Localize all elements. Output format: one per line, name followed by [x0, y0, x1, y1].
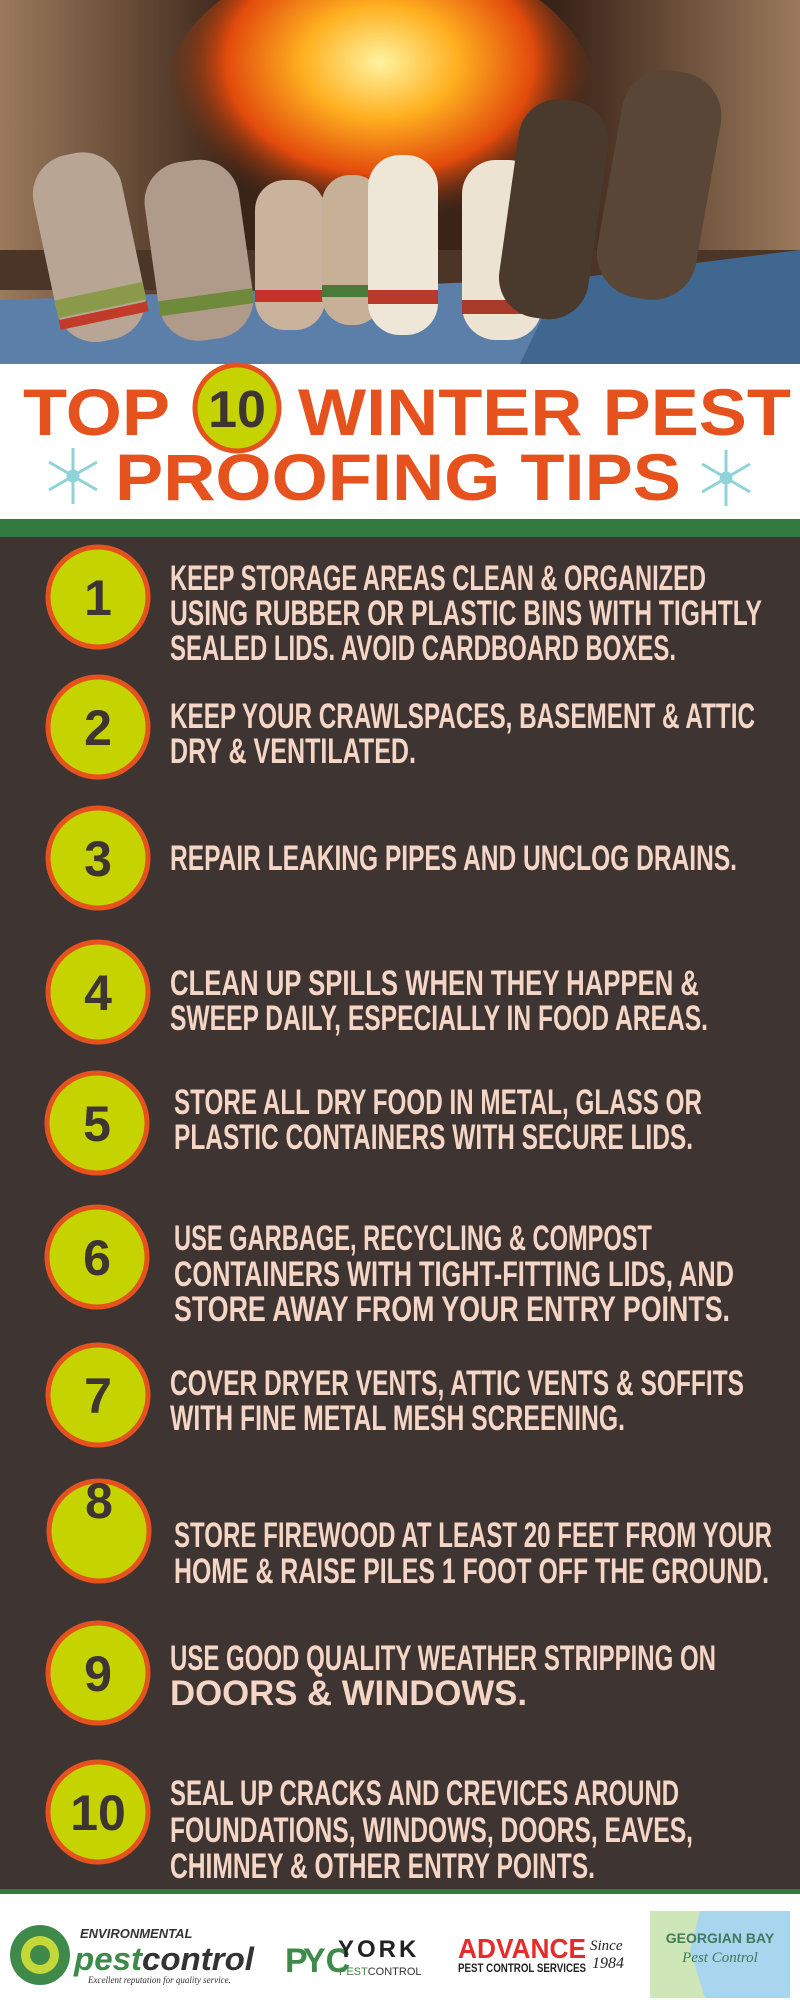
title panel: TOP	[23, 375, 170, 449]
logo: york pest control	[285, 1936, 422, 1980]
panel: tips list: 5	[83, 1096, 111, 1152]
tip 10: CHIMNEY & OTHER ENTRY POINTS.	[170, 1847, 595, 1886]
title panel	[0, 364, 800, 520]
panel: tips list: 9	[84, 1646, 112, 1702]
icon: 10 badge	[195, 365, 279, 451]
panel: tips list: 3	[84, 831, 112, 887]
title panel: WINTER PEST	[298, 375, 791, 449]
panel: tips list: 8	[85, 1473, 113, 1529]
tip 5	[174, 1083, 702, 1157]
logo: advance pest control: PEST CONTROL SERVICES	[458, 1961, 586, 1975]
icon: snowflake right	[702, 450, 750, 506]
panel: tips list: 4	[84, 965, 112, 1021]
tip 8	[174, 1516, 772, 1591]
logo: york pest control: P	[285, 1942, 308, 1980]
logo: georgian bay pest control	[650, 1911, 790, 1998]
tip 1	[170, 559, 762, 668]
logo: york pest control: YORK	[338, 1936, 419, 1963]
logo: environmental pest control: ENVIRONMENTAL	[80, 1926, 192, 1941]
logo: advance pest control: Since	[590, 1938, 623, 1954]
logo: environmental pest control: pestcontrol	[73, 1941, 255, 1977]
tip 2	[170, 697, 755, 771]
panel: tips list: 1	[84, 570, 112, 626]
tip 4	[170, 964, 708, 1038]
panel: tips list	[0, 537, 800, 1889]
logo: york pest control: PESTCONTROL	[339, 1966, 422, 1978]
photo: socks by fireplace	[0, 0, 800, 364]
panel: tips list: 2	[84, 700, 112, 756]
logo: georgian bay pest control: Pest Control	[681, 1950, 758, 1966]
tip 6	[174, 1219, 734, 1329]
logo: york pest control: YC	[303, 1942, 350, 1980]
logo: advance pest control: ADVANCE	[458, 1933, 586, 1964]
tip 7	[170, 1364, 744, 1438]
tip 9	[170, 1639, 716, 1713]
tip 7: WITH FINE METAL MESH SCREENING.	[170, 1399, 625, 1438]
title panel: PROOFING TIPS	[115, 440, 681, 514]
panel: tips list: 10	[70, 1785, 126, 1841]
tip 10	[170, 1774, 693, 1886]
panel: tips list: 6	[83, 1230, 111, 1286]
logo: advance pest control	[458, 1933, 624, 1975]
panel: tips list: 7	[84, 1368, 112, 1424]
logo: georgian bay pest control: GEORGIAN BAY	[666, 1930, 775, 1946]
tip 2: DRY & VENTILATED.	[170, 732, 416, 771]
tip 9: DOORS & WINDOWS.	[170, 1674, 527, 1713]
icon: 10 badge: 10	[208, 381, 266, 439]
icon: snowflake left	[49, 448, 97, 504]
logo: environmental pest control: Excellent reputation for quality service.	[87, 1975, 231, 1985]
logo: environmental pest control	[10, 1925, 255, 1985]
logo: advance pest control: 1984	[592, 1955, 624, 1972]
